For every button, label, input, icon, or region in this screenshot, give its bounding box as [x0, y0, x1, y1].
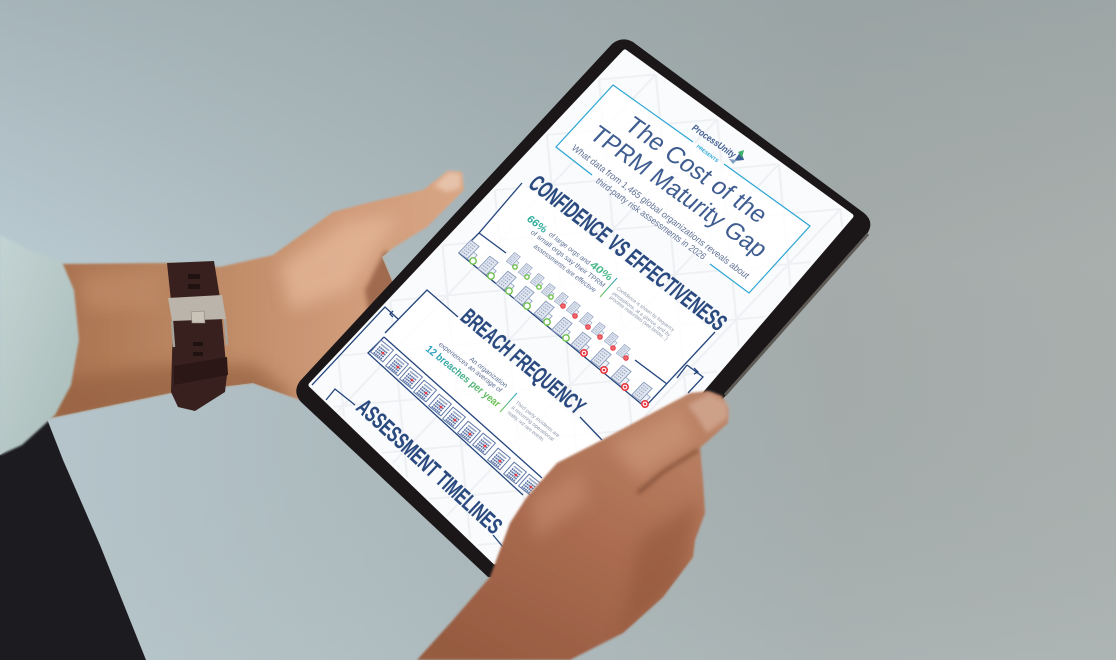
stat text: 12 breaches per year — [423, 344, 502, 410]
note: reality, not rare events. — [506, 410, 546, 443]
panel: breach frequency — [312, 290, 602, 496]
divider — [600, 278, 617, 297]
stat text: 66% — [524, 214, 550, 236]
dark trousers — [0, 419, 146, 660]
tablet screen — [311, 52, 851, 565]
divider — [500, 393, 517, 412]
icon grid: large buildings — [459, 240, 656, 404]
subtitle: third-party risk assessments in 2026 — [593, 176, 708, 262]
title frame — [556, 85, 810, 293]
panel: assessment timelines — [326, 389, 508, 547]
heading: ASSESSMENT TIMELINES — [352, 394, 508, 539]
tablet body — [296, 39, 870, 590]
connector with arrow — [677, 365, 703, 393]
red not-effective badges — [561, 304, 648, 407]
stat text: 40% — [587, 260, 615, 284]
keeper band — [174, 357, 228, 385]
stat text: experiences an average of — [437, 341, 503, 394]
tablet metal edge — [725, 234, 868, 395]
note: Third party incidents are — [514, 400, 561, 439]
shirt sleeve — [0, 235, 79, 455]
calendar icons — [371, 340, 541, 496]
logo mark — [729, 150, 744, 164]
green effective badges — [470, 258, 569, 341]
section frame — [385, 290, 602, 440]
skin shading — [50, 215, 402, 430]
stat text: of small orgs say their TPRM — [529, 229, 606, 289]
stat text — [524, 214, 615, 294]
note: a recurring operational — [510, 405, 555, 443]
subtitle: What data from 1,465 global organizations reveals about — [569, 143, 752, 281]
thumb nail — [434, 172, 461, 192]
note: Confidence is shown by frequency — [615, 286, 676, 333]
note: perceptions, at a glance, and by — [611, 291, 672, 338]
left arm and hand — [50, 171, 464, 430]
ProcessUnity logo: ProcessUnity — [689, 123, 739, 161]
thumb crease — [638, 450, 698, 493]
watch strap — [167, 261, 228, 411]
section backgrounds — [368, 85, 810, 490]
title: The Cost of the — [619, 112, 774, 228]
panel: confidence vs effectiveness — [459, 171, 732, 407]
panel: title block — [556, 85, 810, 293]
icon grid: small buildings — [506, 252, 633, 359]
calendar row frame — [368, 337, 542, 495]
section frame — [326, 389, 503, 547]
connector with arrow — [312, 307, 398, 385]
stat text: assessments are effective — [532, 243, 597, 294]
stat text: An organization — [468, 356, 509, 390]
ProcessUnity logo: PRESENTS — [695, 144, 720, 164]
buckle — [168, 295, 227, 347]
heading: BREACH FREQUENCY — [456, 304, 591, 419]
strap holes — [188, 274, 203, 356]
stat text: of large orgs and — [547, 231, 592, 267]
note: process maturities (see below...) — [608, 295, 669, 342]
thumb nail — [688, 393, 728, 433]
right hand holding tablet — [417, 391, 728, 660]
screen lattice pattern — [311, 52, 851, 565]
heading: CONFIDENCE VS EFFECTIVENESS — [523, 171, 732, 336]
section frame — [459, 183, 715, 407]
title: TPRM Maturity Gap — [584, 121, 773, 263]
skin shading — [530, 410, 700, 640]
